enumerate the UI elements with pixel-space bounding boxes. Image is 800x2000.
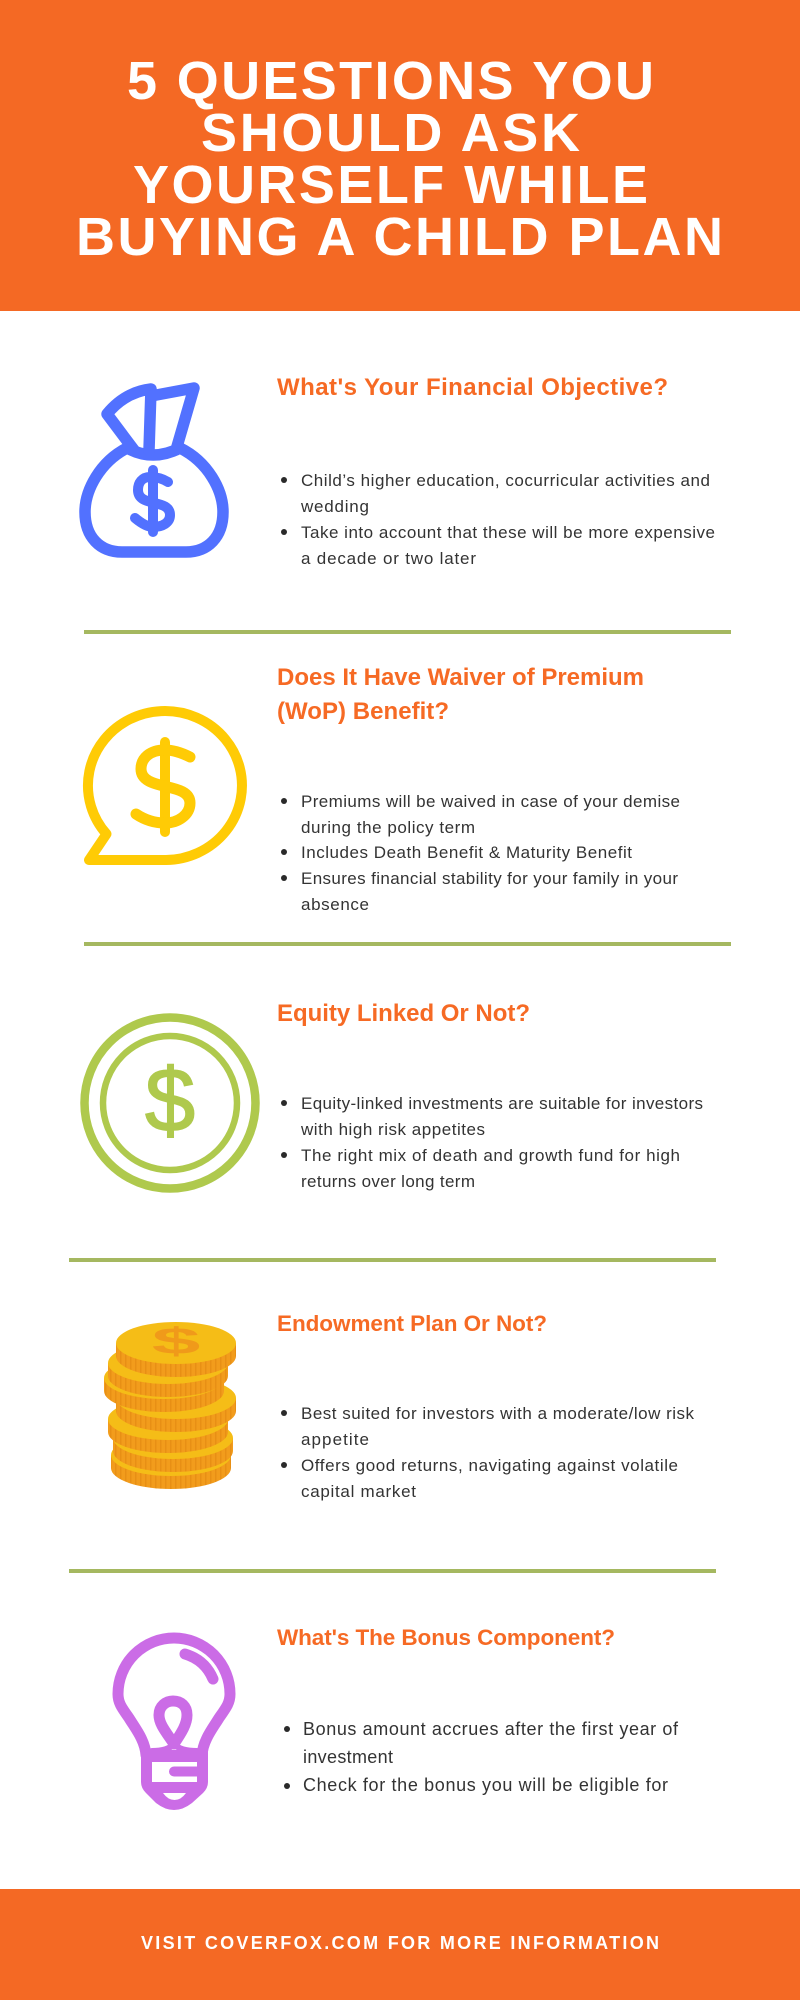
icon: coin stack [104,1321,236,1489]
section 3 bullets: The right mix of death and growth fund for high [301,1146,680,1165]
section 3 bullets: Equity-linked investments are suitable for investors [301,1094,703,1113]
section 1 heading: What's Your Financial Objective? [277,374,668,401]
section 1 bullets: Child’s higher education, cocurricular activities and [301,471,710,490]
section 2 heading: (WoP) Benefit? [277,698,449,725]
section 1 bullets: a decade or two later [301,549,476,568]
footer banner [0,1889,800,2000]
section 2 bullets: Ensures financial stability for your family in your [301,869,678,888]
section 1 bullets: Take into account that these will be more expensive [301,523,715,542]
title: 5 QUESTIONS YOU [127,51,654,111]
icon: light bulb [118,1638,230,1810]
header banner [0,0,800,311]
section 3 bullets: with high risk appetites [300,1120,485,1139]
section 5 bullets: Bonus amount accrues after the first year of [303,1719,679,1739]
section 1 bullets [281,471,715,568]
icon: coin [84,1018,256,1188]
section 3 heading: Equity Linked Or Not? [277,1000,530,1027]
section 5 bullets: Check for the bonus you will be eligible for [303,1775,668,1795]
icon: coin: $ [145,1051,195,1151]
section 2 bullets: Includes Death Benefit & Maturity Benefit [301,843,632,862]
icon: coin stack: $ [152,1321,200,1362]
section 2 heading [277,664,644,725]
section 4 bullets: Best suited for investors with a moderate/low risk [301,1404,694,1423]
icon: speech bubble with dollar [88,711,242,860]
section 2 heading: Does It Have Waiver of Premium [277,664,644,691]
section 4 bullets: Offers good returns, navigating against volatile [301,1456,678,1475]
section 4 heading: Endowment Plan Or Not? [277,1311,547,1336]
section 2 bullets: during the policy term [301,818,475,837]
section 2 bullets: Premiums will be waived in case of your demise [301,792,680,811]
title: BUYING A CHILD PLAN [76,207,723,267]
section 2 bullets: absence [301,895,369,914]
section 4 bullets: capital market [301,1482,416,1501]
icon: money bag [85,388,223,552]
section 5 heading: What's The Bonus Component? [277,1625,615,1650]
section 1 bullets: wedding [300,497,369,516]
title: SHOULD ASK [201,103,580,163]
section 4 bullets [281,1404,694,1501]
section 5 bullets: investment [303,1747,393,1767]
section 3 bullets: returns over long term [301,1172,475,1191]
footer text: VISIT COVERFOX.COM FOR MORE INFORMATION [141,1933,659,1953]
section 3 bullets [281,1094,703,1191]
title: YOURSELF WHILE [133,155,648,215]
title [76,51,723,267]
section 2 bullets [281,792,680,914]
section 5 bullets [284,1719,679,1795]
section 4 bullets: appetite [301,1430,369,1449]
